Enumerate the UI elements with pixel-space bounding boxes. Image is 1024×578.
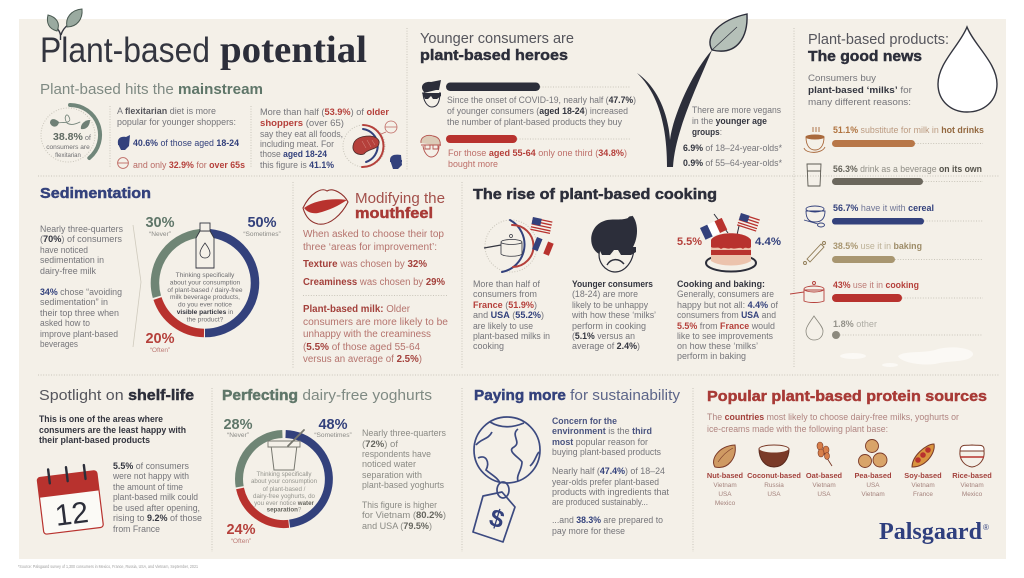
text: shelf-life body: be used after opening, (113, 503, 200, 513)
donut chart: visible particles: “Never” (149, 231, 171, 238)
panel: yoghurts (222, 387, 447, 545)
donut chart: water separation: Thinking specifically (256, 471, 312, 478)
text: col 2: perform in cooking (572, 321, 646, 331)
text: mouthfeel body: Plant-based milk: Older (303, 304, 411, 315)
panel: plant-based cooking: 5.5% (677, 236, 702, 248)
intro text: Consumers buy (808, 73, 877, 83)
panel: protein sources (707, 388, 992, 545)
text: vegans: in the younger age (692, 116, 767, 126)
column: soy: France (913, 491, 933, 498)
text: col 3: like to see improvements (677, 331, 774, 341)
text: col 3: on how these ‘milks’ (677, 341, 758, 351)
text: mouthfeel body: Texture was chosen by 32% (303, 259, 427, 270)
text: mouthfeel body: unhappy with the creaminess (303, 329, 431, 340)
text: sedimentation body: Nearly three-quarters (40, 224, 124, 234)
panel: paying more (473, 387, 681, 542)
panel: plant-based cooking: 4.4% (755, 236, 781, 248)
donut chart: visible particles: 20% (145, 331, 175, 347)
row: other (806, 316, 983, 340)
heading: Younger consumers are (420, 31, 574, 47)
text: shelf-life body: rising to 9.2% of those (113, 513, 202, 523)
text: col 2: average of 2.4%) (572, 341, 640, 351)
icon: French flag (532, 237, 554, 256)
donut chart: water separation: you ever notice water (254, 500, 315, 507)
donut: flexitarian 38.8% (41, 105, 100, 162)
column: rice: Mexico (962, 491, 983, 498)
donut chart: visible particles: the product? (187, 316, 224, 324)
text: older shoppers (260, 107, 390, 170)
icon: pot with flags (484, 217, 554, 272)
text: sustainability body: year-olds prefer plant-based (552, 477, 659, 487)
row: other: 1.8% other (833, 319, 877, 329)
text: col 2: (5.1% versus an (572, 331, 635, 341)
icon: sprout (47, 9, 82, 40)
column: oat: USA (817, 491, 831, 498)
donut chart: water separation: 24% (226, 522, 256, 538)
column: coconut: Russia (764, 482, 784, 489)
text: col 3: 5.5% from France would (677, 321, 775, 331)
text: older shoppers: More than half ( 53.9%) of older (260, 107, 390, 117)
column: nut: Mexico (715, 500, 736, 507)
icon: meat with rings (343, 125, 385, 167)
text: sedimentation body: sedimentation in (40, 255, 104, 265)
text: sustainability body: Nearly half (47.4%) of 18–24 (552, 466, 665, 476)
text: shelf-life body: the amount of time (113, 482, 183, 492)
icon: blue head (390, 155, 402, 169)
text: intro: ice-creams made with the following plant base: (707, 424, 888, 434)
row: beverage (807, 164, 983, 186)
text: col 3: perform in baking (677, 351, 746, 361)
column: nut: USA (718, 491, 732, 498)
column: coconut: USA (767, 491, 781, 498)
donut chart: visible particles: 50% (247, 215, 277, 231)
column: oat (806, 442, 843, 498)
icon: milk drop (938, 27, 997, 112)
text: yoghurts body: (72%) of (362, 439, 399, 449)
donut chart: water separation: “Often” (231, 538, 251, 545)
text: older shoppers: those aged 18-24 (260, 149, 327, 159)
text: older shoppers: say they eat all foods, (260, 129, 343, 139)
text: col 3: happy but not all: 4.4% of (677, 300, 779, 310)
icon: globe with price tag (473, 417, 540, 542)
donut chart: water separation: 28% (223, 417, 253, 433)
text: older shoppers: this figure is 41.1% (260, 160, 334, 170)
donut chart: visible particles: of plant-based / dairy-free (167, 287, 243, 294)
text: col 1: are likely to use (473, 321, 533, 331)
row: beverage: 56.3% drink as a beverage on its own (833, 164, 982, 174)
icon: globe with price tag: $ (486, 504, 508, 534)
text: sedimentation body: dairy-free milk (40, 266, 97, 276)
panel: mouthfeel (303, 190, 449, 365)
bar: 47.7% (446, 82, 631, 91)
panel: younger consumers (420, 14, 783, 169)
heading: Modifying the (355, 191, 445, 207)
text: col 2: with how these ‘milks’ (571, 310, 656, 320)
text: yoghurts body: plant-based yoghurts (362, 480, 445, 490)
donut chart: water separation: “Sometimes” (314, 432, 352, 439)
text: mouthfeel body: three ‘areas for improvement’: (303, 242, 437, 253)
text: intro: This is one of the areas where (39, 414, 163, 424)
panel: plant-based potential (40, 9, 402, 170)
logo: Palsgaard: Palsgaard (879, 519, 983, 545)
text: intro (39, 414, 186, 445)
text: older (448, 148, 627, 169)
text: shelf-life body (112, 461, 202, 534)
column: soy: Soy-based (904, 471, 942, 480)
text: yoghurts body: noticed water (362, 459, 416, 469)
donut chart: water separation: about your consumption (251, 478, 318, 485)
icon: cake with flags (700, 213, 760, 272)
icon: plant (637, 14, 747, 167)
intro text: plant-based ‘milks’ for (808, 85, 912, 95)
text: younger: Since the onset of COVID-19, nearly half (47.7%) (447, 95, 636, 105)
text: col 1: plant-based milks in (473, 331, 550, 341)
icon: young head with sunglasses (591, 215, 637, 272)
panel: sedimentation (40, 186, 281, 354)
text: yoghurts body: separation with (362, 470, 422, 480)
icon: young head (118, 135, 130, 150)
icon: French flag (700, 218, 727, 240)
text: sedimentation body: beverages (40, 339, 79, 349)
text: mouthfeel body: When asked to choose their top (303, 229, 445, 240)
text: col 1: More than half of (473, 279, 541, 289)
text: sedimentation body: sedimentation” in (40, 297, 108, 307)
column: pea (855, 440, 892, 498)
text: sustainability body: environment is the third (552, 426, 652, 436)
heading: The good news (808, 48, 922, 65)
heading (808, 32, 949, 65)
donut chart: visible particles: 30% (145, 215, 175, 231)
row: hot drinks: 51.1% substitute for milk in hot drinks (833, 125, 984, 135)
text: yoghurts body: respondents have (362, 449, 431, 459)
row: cereal (804, 203, 983, 227)
text: yoghurts body: Nearly three-quarters (362, 428, 447, 438)
text: col 2: likely to be unhappy (572, 300, 649, 310)
donut chart: water separation: 48% (318, 417, 348, 433)
text: col 3: consumers from USA and (677, 310, 776, 320)
row: hot drinks (804, 125, 984, 152)
column: rice: Vietnam (960, 482, 984, 489)
logo: Palsgaard: ® (983, 523, 989, 532)
column: soy (904, 444, 942, 498)
text: sedimentation body: have noticed (40, 245, 88, 255)
column: coconut (747, 445, 801, 498)
text: yoghurts body (362, 428, 447, 531)
heading: plant-based heroes (420, 47, 568, 64)
text: col 2: Younger consumers (572, 279, 653, 289)
text: older: bought more (448, 159, 498, 169)
text: vegans: 0.9% of 55–64-year-olds* (683, 158, 783, 168)
panel: shelf-life (36, 387, 202, 534)
icon: yoghurt pot (268, 430, 304, 470)
text: flexitarian shoppers: 40.6% of those aged 18-24 (133, 138, 239, 148)
subheading: mainstream: Plant-based hits the mainstream (40, 81, 263, 98)
heading: Spotlight on shelf-life (39, 387, 194, 404)
row: cooking (790, 280, 983, 302)
icon: young head with sunglasses (422, 80, 441, 107)
heading (420, 31, 574, 64)
column: oat: Oat-based (806, 471, 843, 480)
row: cooking: 43% use it in cooking (833, 280, 919, 290)
donut chart: water separation: dairy-free yoghurts, do (253, 493, 316, 500)
text: col 1: consumers from (473, 289, 537, 299)
donut chart: visible particles: “Often” (150, 347, 170, 354)
row: baking (804, 241, 983, 264)
donut chart: visible particles: about your consumption (170, 280, 241, 286)
text: sedimentation body: their top three when (40, 308, 119, 318)
donut chart: water separation: of plant-based / (263, 486, 306, 493)
text: yoghurts body: for Vietnam ( 80.2%) (362, 510, 446, 520)
text: shelf-life body: were not happy with (112, 471, 189, 481)
text: col 3: Cooking and baking: (677, 279, 765, 289)
heading (355, 191, 445, 222)
column: nut: Nut-based (707, 471, 744, 480)
donut: flexitarian 38.8%: flexitarian (55, 153, 81, 159)
icon: calendar: 12 (53, 496, 90, 533)
text: sustainability body: most popular reason for (552, 437, 648, 447)
text: sustainability body: buying plant-based products (552, 447, 662, 457)
donut chart: visible particles: visible particles in (177, 309, 234, 316)
text: younger (447, 95, 636, 127)
text: intro: The countries most likely to choose dairy-free milks, yoghurts or (707, 412, 959, 422)
text: col 1: and USA (55.2%) (473, 310, 544, 320)
text: younger: the number of plant-based products they buy (447, 117, 623, 127)
text: sedimentation body: improve plant-based (40, 329, 118, 339)
heading: The rise of plant-based cooking (473, 186, 717, 203)
text: mouthfeel body: versus an average of 2.5%) (303, 354, 422, 365)
icon: lips (303, 190, 348, 224)
text: intro (707, 412, 959, 434)
text: sustainability body: pay more for these (552, 526, 625, 536)
donut chart: visible particles: milk beverage products, (170, 294, 240, 301)
icon: red head bubble (381, 121, 397, 134)
icon: milk carton (196, 223, 214, 268)
donut: flexitarian 38.8%: 38.8% of (53, 132, 91, 143)
donut chart: water separation: “Never” (227, 432, 249, 439)
text: intro: their plant-based products (39, 435, 150, 445)
text: mouthfeel body: (5.5% of those aged 55-64 (303, 342, 421, 353)
panel: the good news (790, 27, 997, 367)
icon: US flag (530, 217, 553, 234)
text: flexitarian shoppers: and only 32.9% for over 65s (133, 160, 245, 170)
text: flexitarian shoppers (117, 106, 245, 170)
column: rice (952, 445, 992, 498)
intro text: many different reasons: (808, 97, 911, 107)
text: sedimentation body (40, 224, 124, 349)
donut chart: visible particles: “Sometimes” (243, 231, 281, 238)
heading: Plant-based products: (808, 32, 949, 48)
text: col 3 (677, 279, 779, 361)
heading: mouthfeel (355, 206, 433, 222)
icon: US flag (737, 213, 760, 232)
text: sedimentation body: asked how to (40, 318, 90, 328)
text: vegans: 6.9% of 18–24-year-olds* (683, 143, 783, 153)
column: nut: Vietnam (713, 482, 737, 489)
bar: 34.8% (446, 135, 631, 143)
column: nut (707, 445, 744, 507)
donut chart: water separation (223, 417, 352, 545)
text: sustainability body: are produced sustainably... (552, 497, 648, 507)
text: older shoppers: including meat. For (260, 139, 334, 149)
text: vegans: groups: (692, 127, 722, 137)
milk splashes (840, 347, 973, 367)
donut chart: water separation: separation? (267, 506, 302, 514)
text: older: For those aged 55-64 only one third (34.8%) (448, 148, 627, 158)
icon: calendar (36, 464, 104, 534)
icon: older head (118, 158, 128, 168)
text: vegans: There are more vegans (692, 105, 782, 115)
text: col 1: France (51.9%) (473, 300, 537, 310)
text: yoghurts body: and USA (79.5%) (362, 521, 432, 531)
donut chart: visible particles: Thinking specifically (176, 272, 235, 279)
column: soy: Vietnam (911, 482, 935, 489)
panel: plant-based cooking (473, 186, 781, 361)
donut chart: visible particles: do you ever notice (178, 302, 232, 308)
text: sedimentation body: (70%) of consumers (40, 234, 123, 244)
text: younger: of younger consumers (aged 18-24) increased (447, 106, 628, 116)
text: sustainability body: products with ingredients that (552, 487, 670, 497)
text: col 1: cooking (473, 341, 504, 351)
intro text (808, 73, 912, 107)
heading: Popular plant-based protein sources (707, 388, 987, 405)
text: sustainability body (552, 416, 670, 536)
text: intro: consumers are the least happy with (39, 425, 186, 435)
text: shelf-life body: plant-based milk could (113, 492, 198, 502)
column: coconut: Coconut-based (747, 471, 801, 480)
heading: Sedimentation (40, 186, 151, 202)
title: potential (220, 29, 367, 71)
text: sustainability body: ...and 38.3% are prepared to (552, 515, 663, 525)
text: mouthfeel body: Creaminess was chosen by 29% (303, 277, 445, 288)
column: oat: Vietnam (812, 482, 836, 489)
source note: *Source: Palsgaard survey of 1,300 consumers in Mexico, France, Russia, USA, and Vietnam, September, 2021 (18, 564, 198, 569)
column: pea: USA (866, 482, 880, 489)
column: pea: Pea-based (855, 471, 892, 480)
text: col 3: Generally, consumers are (677, 289, 774, 299)
column: rice: Rice-based (952, 471, 992, 480)
text: flexitarian shoppers: A flexitarian diet is more (117, 106, 216, 116)
text: shelf-life body: 5.5% of consumers (113, 461, 190, 471)
heading: Paying more for sustainability (474, 387, 681, 404)
text: sustainability body: Concern for the (552, 416, 617, 426)
icon: older head with glasses (421, 135, 441, 157)
text: vegans (683, 105, 783, 168)
text: yoghurts body: This figure is higher (362, 500, 437, 510)
text: shelf-life body: from France (113, 524, 160, 534)
column: pea: Vietnam (861, 491, 885, 498)
text: mouthfeel body: consumers are more likely to be (303, 317, 449, 328)
row: cereal: 56.7% have it with cereal (833, 203, 934, 213)
row: baking: 38.5% use it in baking (833, 241, 922, 251)
text: sedimentation body: 34% chose “avoiding (40, 287, 122, 297)
text: flexitarian shoppers: popular for younger shoppers: (117, 117, 236, 127)
heading: Perfecting dairy-free yoghurts (222, 387, 432, 404)
text: col 1 (473, 279, 550, 351)
title: Plant-based (40, 31, 210, 70)
donut chart: visible particles (145, 215, 281, 354)
text: col 2: (18-24) are more (572, 289, 638, 299)
text: mouthfeel body (303, 229, 449, 365)
title (40, 29, 367, 71)
donut: flexitarian 38.8%: consumers are (46, 144, 90, 151)
text: col 2 (571, 279, 656, 351)
text: older shoppers: shoppers (over 65) (260, 118, 344, 128)
